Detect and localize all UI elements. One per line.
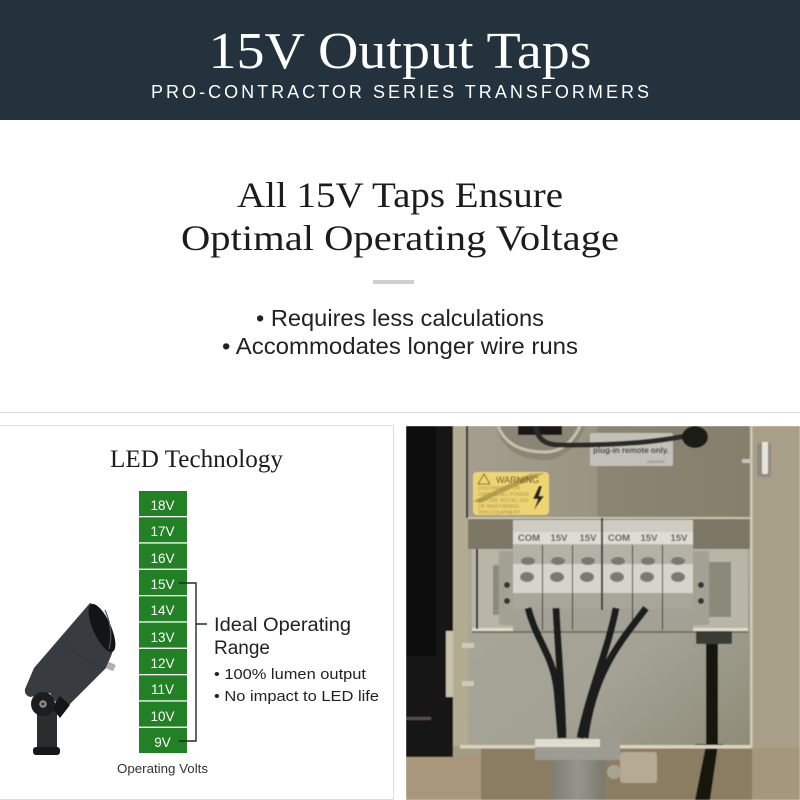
photo: transformer wiring: OR MAINTAINING [478, 504, 519, 510]
icon: landscape spotlight [25, 601, 121, 755]
photo: transformer wiring: plug-in remote only. [593, 446, 669, 455]
volt labels [150, 498, 175, 750]
volt labels: 10V [150, 709, 175, 724]
volt labels: 12V [150, 656, 175, 671]
photo: transformer wiring: UNPLUG ALL POWER [478, 492, 529, 498]
round opening and cord [496, 426, 586, 460]
volt labels: 9V [154, 735, 171, 750]
conduit and bracket [620, 752, 657, 783]
chart: operating volts scale [117, 491, 208, 776]
heading [181, 175, 619, 258]
volt labels: 15V [150, 577, 175, 592]
wires [528, 608, 646, 738]
callout: ideal operating range: • 100% lumen output [214, 666, 367, 683]
bracket: 15V to 9V range [179, 583, 207, 741]
axis caption: Operating Volts [117, 762, 208, 776]
box bottom edge [460, 745, 752, 748]
upper plate [528, 426, 750, 518]
volt cells [139, 491, 187, 753]
bullet list: • Accommodates longer wire runs [222, 333, 578, 359]
terminal labels: COM [608, 533, 630, 544]
photo: transformer wiring [406, 426, 800, 800]
panel: LED technology [0, 426, 394, 800]
door hardware [462, 643, 474, 648]
latch [757, 443, 771, 477]
panel: 15V benefits [0, 120, 800, 412]
callout: ideal operating range: Range [214, 638, 270, 659]
terminal labels: 15V [580, 533, 597, 544]
volt labels: 18V [150, 498, 175, 513]
photo: transformer wiring: THIS EQUIPMENT [478, 510, 521, 516]
subtitle: PRO-CONTRACTOR SERIES TRANSFORMERS [151, 82, 649, 102]
warning label [473, 472, 549, 515]
callout: ideal operating range: • No impact to LED life [214, 688, 379, 705]
din rail [709, 562, 731, 617]
heading: All 15V Taps Ensure [237, 175, 563, 215]
terminal block [512, 544, 694, 546]
volt labels: 14V [150, 603, 175, 618]
volt labels: 13V [150, 630, 175, 645]
bullet list [222, 305, 578, 359]
lower interior [468, 548, 750, 745]
photo: transformer wiring: LB200047 [647, 459, 666, 464]
side clamps [499, 551, 513, 625]
terminal dividers [542, 545, 662, 630]
volt labels: 11V [151, 682, 174, 697]
title: 15V Output Taps [208, 23, 592, 80]
callout: ideal operating range: Ideal Operating [214, 615, 351, 636]
photo: transformer wiring: BEFORE INSTALLING [478, 498, 529, 504]
terminal labels: 15V [551, 533, 568, 544]
terminal labels: 15V [671, 533, 688, 544]
terminal labels: COM [518, 533, 540, 544]
volt labels: 17V [150, 524, 175, 539]
terminal screw holes [520, 557, 685, 582]
bullet list: • Requires less calculations [256, 305, 544, 331]
wall behind the box [452, 745, 482, 758]
photo: transformer wiring: DISCONNECT OR [478, 486, 520, 492]
volt labels: 16V [150, 551, 175, 566]
panel heading: LED Technology [110, 446, 283, 473]
power cord and strain relief [696, 631, 732, 644]
heading: Optimal Operating Voltage [181, 218, 619, 258]
terminal labels [518, 534, 688, 542]
terminal labels: 15V [641, 533, 658, 544]
instruction label [590, 433, 673, 466]
open door [406, 426, 453, 757]
divider [373, 280, 414, 284]
box flange [453, 426, 468, 746]
callout: ideal operating range [214, 615, 379, 705]
hinge [446, 631, 453, 697]
header banner [0, 0, 800, 120]
photo: transformer wiring: WARNING [496, 475, 539, 485]
